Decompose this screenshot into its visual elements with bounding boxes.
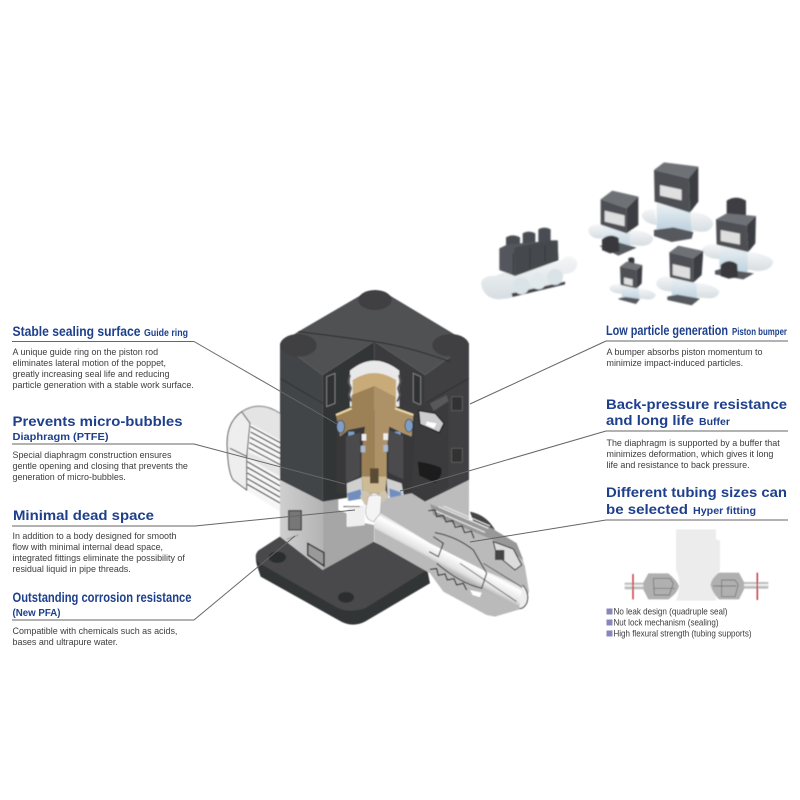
panel: back-pressure resistance bbox=[606, 396, 788, 470]
rule bbox=[606, 519, 788, 521]
right tube and fitting bbox=[711, 573, 768, 599]
body text: flow with minimal internal dead space, bbox=[12, 542, 163, 552]
subheading: Diaphragm (PTFE) bbox=[12, 431, 108, 443]
rule bbox=[606, 340, 788, 342]
list text: High flexural strength (tubing supports) bbox=[614, 628, 752, 638]
fitting, threaded nut and tube bbox=[366, 493, 529, 617]
rule bbox=[12, 525, 195, 527]
body text: integrated fittings eliminate the possibility of bbox=[12, 553, 185, 563]
upper body, dark faces bbox=[280, 290, 469, 502]
base plate bbox=[256, 537, 430, 625]
heading line 2: and long life bbox=[606, 412, 694, 428]
tall valve, back centre bbox=[642, 162, 713, 242]
rule bbox=[12, 443, 194, 445]
body text: particle generation with a stable work surface. bbox=[12, 380, 194, 390]
label plates bbox=[289, 511, 301, 530]
callout line: dead space bbox=[195, 510, 355, 526]
body text: A unique guide ring on the piston rod bbox=[12, 347, 158, 357]
small valve, back left bbox=[588, 191, 653, 256]
panel: outstanding corrosion resistance bbox=[12, 589, 194, 647]
rule bbox=[606, 430, 788, 432]
callout line: guide ring bbox=[194, 342, 337, 424]
panel: prevents micro-bubbles bbox=[12, 413, 194, 482]
callout line: diaphragm bbox=[194, 444, 345, 484]
internal cavity bbox=[327, 359, 421, 505]
seals bbox=[337, 420, 345, 433]
inner sleeves bbox=[346, 433, 360, 483]
body text: bases and ultrapure water. bbox=[12, 637, 118, 647]
body text: Compatible with chemicals such as acids, bbox=[12, 626, 177, 636]
heading: Prevents micro-bubbles bbox=[12, 413, 183, 429]
heading: Outstanding corrosion resistance bbox=[12, 589, 192, 605]
heading: Minimal dead space bbox=[13, 507, 154, 523]
subheading: Hyper fitting bbox=[693, 505, 756, 517]
heading: Different tubing sizes can bbox=[606, 484, 787, 500]
right side pocket: bumper and buffer bbox=[415, 395, 462, 502]
body text: greatly increasing seal life and reducing bbox=[12, 369, 170, 379]
left tube and fitting bbox=[625, 573, 679, 599]
body text: minimize impact-induced particles. bbox=[606, 358, 743, 368]
panel: low particle generation bbox=[606, 322, 788, 368]
heading: Back-pressure resistance bbox=[606, 396, 787, 412]
body text: A bumper absorbs piston momentum to bbox=[606, 347, 763, 357]
list text: Nut lock mechanism (sealing) bbox=[614, 618, 719, 628]
rule bbox=[12, 619, 194, 621]
subheading: Guide ring bbox=[144, 327, 188, 339]
body text: In addition to a body designed for smooth bbox=[12, 531, 176, 541]
list text: No leak design (quadruple seal) bbox=[614, 606, 728, 616]
lower body, grey faces bbox=[280, 480, 469, 570]
body text: eliminates lateral motion of the poppet, bbox=[12, 358, 166, 368]
capped valve, right bbox=[702, 198, 773, 279]
callout line: buffer bbox=[400, 431, 606, 491]
rule bbox=[12, 340, 194, 342]
heading: Stable sealing surface bbox=[12, 323, 141, 339]
cutaway valve illustration bbox=[227, 290, 529, 625]
callout line: PFA body bbox=[194, 536, 295, 620]
callout line: hyper fitting bbox=[470, 520, 606, 542]
body text: minimizes deformation, which gives it long bbox=[606, 449, 773, 459]
subheading: Buffer bbox=[699, 416, 730, 428]
product photo: valve family bbox=[481, 162, 773, 305]
feature list bbox=[606, 606, 752, 638]
diaphragm and buffers bbox=[347, 477, 363, 501]
valve body bbox=[676, 529, 720, 601]
heading line 2: be selected bbox=[606, 501, 688, 517]
tiny valve, front centre bbox=[609, 257, 656, 304]
panel: different tubing sizes bbox=[606, 484, 788, 520]
rear fitting nut bbox=[227, 406, 281, 512]
piston bbox=[336, 386, 374, 493]
mid valve, front right bbox=[656, 246, 719, 305]
body text: gentle opening and closing that prevents the bbox=[12, 461, 188, 471]
red arrows bbox=[633, 573, 757, 600]
panel: stable sealing surface bbox=[12, 323, 194, 390]
body text: residual liquid in pipe threads. bbox=[12, 564, 131, 574]
heading: Low particle generation bbox=[606, 322, 728, 338]
panel: minimal dead space bbox=[12, 507, 195, 574]
body text: life and resistance to back pressure. bbox=[606, 460, 750, 470]
hyper fitting diagram bbox=[625, 529, 768, 601]
flow channel cross-section bbox=[343, 504, 407, 527]
valve manifold bbox=[481, 228, 577, 299]
body text: generation of micro-bubbles. bbox=[12, 472, 126, 482]
bullets bbox=[606, 608, 612, 636]
body text: The diaphragm is supported by a buffer that bbox=[606, 438, 780, 448]
subheading: (New PFA) bbox=[12, 607, 60, 619]
callout line: piston bumper bbox=[470, 341, 606, 404]
body text: Special diaphragm construction ensures bbox=[12, 450, 172, 460]
